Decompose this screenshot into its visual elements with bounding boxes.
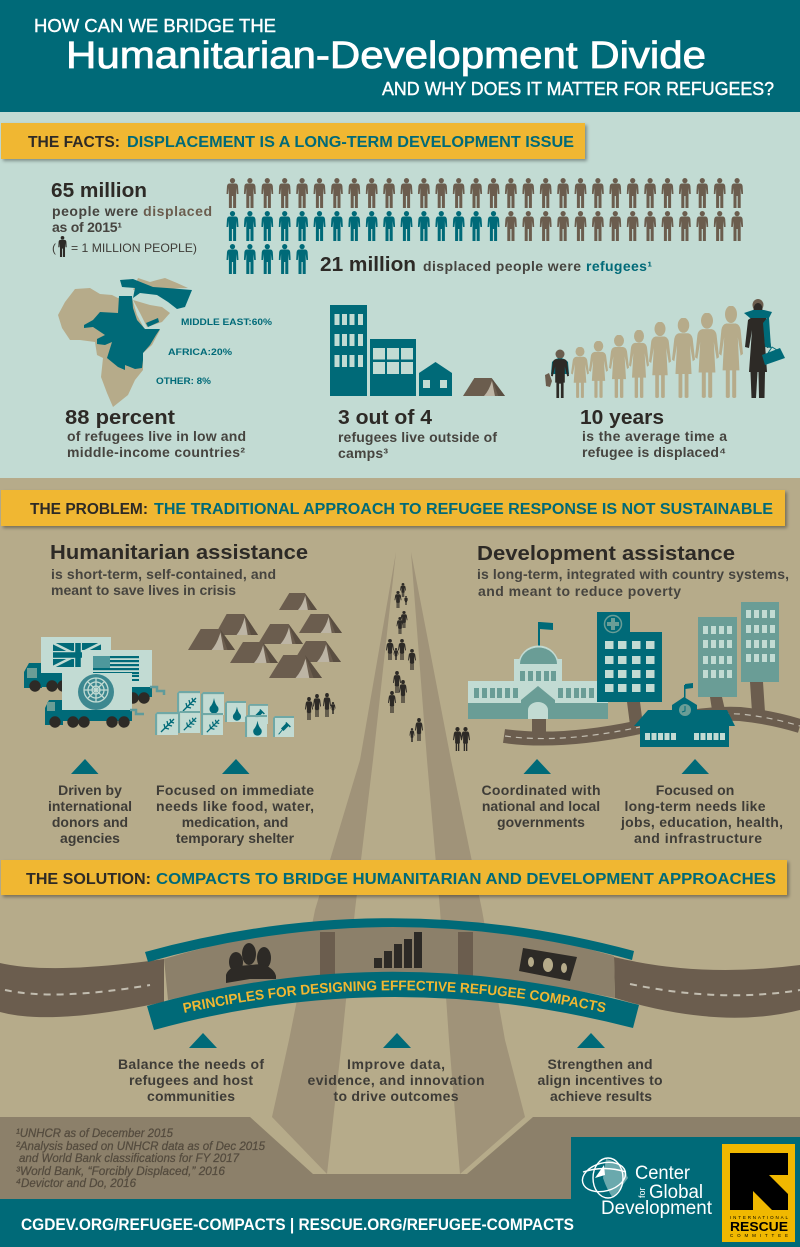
- title: subtitle: AND WHY DOES IT MATTER FOR REFUGEES?: [382, 78, 774, 99]
- banner: the facts: DISPLACEMENT IS A LONG-TERM DEVELOPMENT ISSUE: [127, 134, 574, 151]
- map: Africa and Middle East: [58, 278, 273, 407]
- banner: the solution: COMPACTS TO BRIDGE HUMANITARIAN AND DEVELOPMENT APPROACHES: [156, 871, 776, 888]
- header band: [0, 0, 800, 112]
- stat: 88 percent: 88 percent: [65, 407, 175, 429]
- stat: 65 million: people were displaced: [52, 203, 212, 219]
- stat: 21 million: displaced people were: [423, 258, 581, 274]
- illustration: child growing into adult: [545, 299, 785, 398]
- heading: development assistance: and meant to reduce poverty: [478, 583, 681, 599]
- footnotes: [16, 1126, 265, 1190]
- map legend: OTHER: 8%: [156, 376, 212, 387]
- title: kicker: HOW CAN WE BRIDGE THE: [34, 15, 276, 36]
- triangle markers: humanitarian: [71, 759, 250, 774]
- caption: strengthen incentives: achieve results: [550, 1088, 652, 1104]
- stat: 3 out of 4: 3 out of 4: [338, 407, 433, 429]
- icon: buildings, house and tent: [330, 305, 505, 396]
- map legend: [156, 317, 273, 387]
- icon: bar chart: [374, 932, 422, 968]
- stat: 10 years: refugee is displaced⁴: [582, 444, 726, 460]
- trucks with flags: [24, 637, 164, 728]
- row 3 teal: [226, 244, 308, 274]
- caption: strengthen incentives: [538, 1056, 662, 1104]
- logo: Center for Global Development: [579, 1158, 713, 1219]
- banner: the problem: THE PROBLEM:: [30, 501, 148, 518]
- heading: humanitarian assistance: Humanitarian assistance: [50, 542, 308, 564]
- logo: Center for Global Development: Development: [601, 1198, 713, 1219]
- caption: improve data: [308, 1056, 484, 1104]
- stat: 21 million: refugees¹: [586, 258, 652, 274]
- triangle markers: development: [524, 759, 709, 774]
- woman with backpack and bag: [744, 299, 785, 398]
- caption: improve data: to drive outcomes: [334, 1088, 459, 1104]
- row 1: [226, 178, 743, 208]
- truck: USA: [82, 650, 164, 704]
- heading: humanitarian assistance: meant to save lives in crisis: [51, 582, 236, 598]
- ribbon: [147, 972, 639, 1030]
- stat: 10 years: 10 years: [580, 407, 664, 429]
- caption: immediate needs: needs like food, water,: [156, 798, 314, 814]
- stat: 65 million: = 1 MILLION PEOPLE): [71, 241, 197, 255]
- icon: people: [226, 943, 276, 983]
- stat: 10 years: is the average time a: [582, 428, 727, 444]
- icon: hospital: [597, 612, 662, 702]
- map legend: MIDDLE EAST:60%: [181, 317, 273, 328]
- footer bar: [0, 1137, 800, 1247]
- ground and footnote panel: [0, 1117, 800, 1199]
- stat: 88 percent: of refugees live in low and: [67, 428, 246, 444]
- logo: International Rescue Committee: INTERNATIONAL: [730, 1215, 788, 1220]
- logo: Center for Global Development: Global: [649, 1182, 703, 1203]
- icon: school: [634, 683, 735, 747]
- section background: facts: [0, 112, 800, 478]
- heading: development assistance: is long-term, integrated with country systems,: [477, 566, 789, 582]
- footnotes: and World Bank classifications for FY 2017: [19, 1151, 240, 1165]
- stat: 3 out of 4: [338, 407, 497, 461]
- banner: the problem: [1, 490, 785, 526]
- aid boxes: food, water, medicine: [155, 691, 294, 737]
- people walking along the road: [386, 583, 423, 742]
- caption: driven by donors: agencies: [60, 830, 120, 846]
- banner: the problem: THE TRADITIONAL APPROACH TO REFUGEE RESPONSE IS NOT SUSTAINABLE: [154, 501, 773, 518]
- caption: balance needs: [118, 1056, 264, 1104]
- footnotes: ¹UNHCR as of December 2015: [16, 1126, 173, 1140]
- road: left side: [0, 959, 164, 1017]
- tent camp: [188, 593, 342, 678]
- triangle markers: solution: [189, 1033, 605, 1048]
- banner: the facts: [1, 123, 585, 159]
- map legend: AFRICA:20%: [168, 347, 233, 358]
- stat: 65 million: [51, 180, 212, 257]
- footer URLs: CGDEV.ORG/REFUGEE-COMPACTS | RESCUE.ORG/REFUGEE-COMPACTS: [21, 1215, 574, 1234]
- caption: strengthen incentives: Strengthen and: [548, 1056, 652, 1072]
- stat: 88 percent: middle-income countries²: [67, 444, 245, 460]
- banner: the solution: THE SOLUTION:: [26, 871, 151, 888]
- footnotes: ²Analysis based on UNHCR data as of Dec 2015: [16, 1139, 265, 1153]
- caption: immediate needs: Focused on immediate: [156, 782, 314, 798]
- stat: 10 years: [580, 407, 727, 460]
- banner: the solution: [1, 860, 787, 895]
- icon: office towers: [698, 602, 779, 697]
- caption: strengthen incentives: align incentives to: [538, 1072, 662, 1088]
- caption: long-term needs: long-term needs like: [624, 798, 766, 814]
- caption: long-term needs: Focused on: [656, 782, 734, 798]
- caption: coordinated with governments: governments: [497, 814, 585, 830]
- caption: immediate needs: [156, 782, 314, 846]
- caption: improve data: Improve data,: [347, 1056, 445, 1072]
- row 2 brown: [505, 211, 743, 241]
- row 2 teal: [226, 211, 500, 241]
- caption: coordinated with governments: national and local: [482, 798, 600, 814]
- caption: long-term needs: [620, 782, 783, 846]
- bridge top arc: [145, 918, 634, 962]
- logo: International Rescue Committee: [722, 1144, 795, 1242]
- bridge: [145, 918, 639, 1030]
- caption: driven by donors: donors and: [52, 814, 128, 830]
- caption: balance needs: refugees and host: [129, 1072, 253, 1088]
- stat: 65 million: 65 million: [51, 180, 147, 202]
- stat: 21 million: [320, 254, 652, 276]
- caption: balance needs: communities: [147, 1088, 235, 1104]
- family group: [305, 693, 336, 720]
- caption: coordinated with governments: Coordinated with: [482, 782, 600, 798]
- banner: the facts: THE FACTS:: [28, 134, 120, 151]
- logo: Center for Global Development: for: [637, 1187, 647, 1198]
- section background: problem and solution: [0, 478, 800, 1118]
- truck: UK: [24, 637, 111, 692]
- logo: International Rescue Committee: COMMITTEE: [730, 1233, 788, 1238]
- caption: immediate needs: temporary shelter: [176, 830, 295, 846]
- road perspective stripes: [272, 552, 525, 1174]
- caption: driven by donors: Driven by: [58, 782, 122, 798]
- caption: balance needs: Balance the needs of: [118, 1056, 264, 1072]
- heading: development assistance: [477, 543, 789, 599]
- pictogram: 65 people, 21 teal: [226, 178, 743, 274]
- caption: long-term needs: jobs, education, health,: [620, 814, 783, 830]
- stat: 3 out of 4: camps³: [338, 445, 388, 461]
- logo: International Rescue Committee: RESCUE: [730, 1219, 788, 1234]
- caption: driven by donors: [48, 782, 132, 846]
- development road and connectors: [504, 682, 800, 739]
- child with backpack and teddy: [545, 350, 569, 398]
- ribbon label: PRINCIPLES FOR DESIGNING EFFECTIVE REFUGEE COMPACTS: [182, 980, 606, 1013]
- icon: banknote: [519, 948, 577, 981]
- stat: 65 million: (: [52, 241, 56, 255]
- caption: immediate needs: medication, and: [182, 814, 288, 830]
- caption: long-term needs: and infrastructure: [634, 830, 762, 846]
- logo: Center for Global Development: Center: [635, 1163, 691, 1184]
- footnotes: ³World Bank, “Forcibly Displaced,” 2016: [16, 1164, 225, 1178]
- title: main: Humanitarian-Development Divide: [66, 35, 706, 77]
- caption: driven by donors: international: [48, 798, 132, 814]
- couple walking: [453, 727, 470, 751]
- heading: development assistance: Development assistance: [477, 543, 735, 565]
- stat: 65 million: as of 2015¹: [52, 219, 122, 235]
- stat: 3 out of 4: refugees live outside of: [338, 429, 497, 445]
- caption: improve data: evidence, and innovation: [308, 1072, 484, 1088]
- road: right side: [614, 957, 800, 1018]
- heading: humanitarian assistance: is short-term, self-contained, and: [51, 566, 276, 582]
- stat: 21 million: 21 million: [320, 254, 416, 276]
- caption: coordinated with governments: [482, 782, 600, 830]
- footnotes: ⁴Devictor and Do, 2016: [16, 1176, 136, 1190]
- icon: government capitol building: [468, 622, 608, 719]
- heading: humanitarian assistance: [50, 542, 308, 598]
- truck: UN: [45, 673, 144, 728]
- stat: 88 percent: [65, 407, 246, 460]
